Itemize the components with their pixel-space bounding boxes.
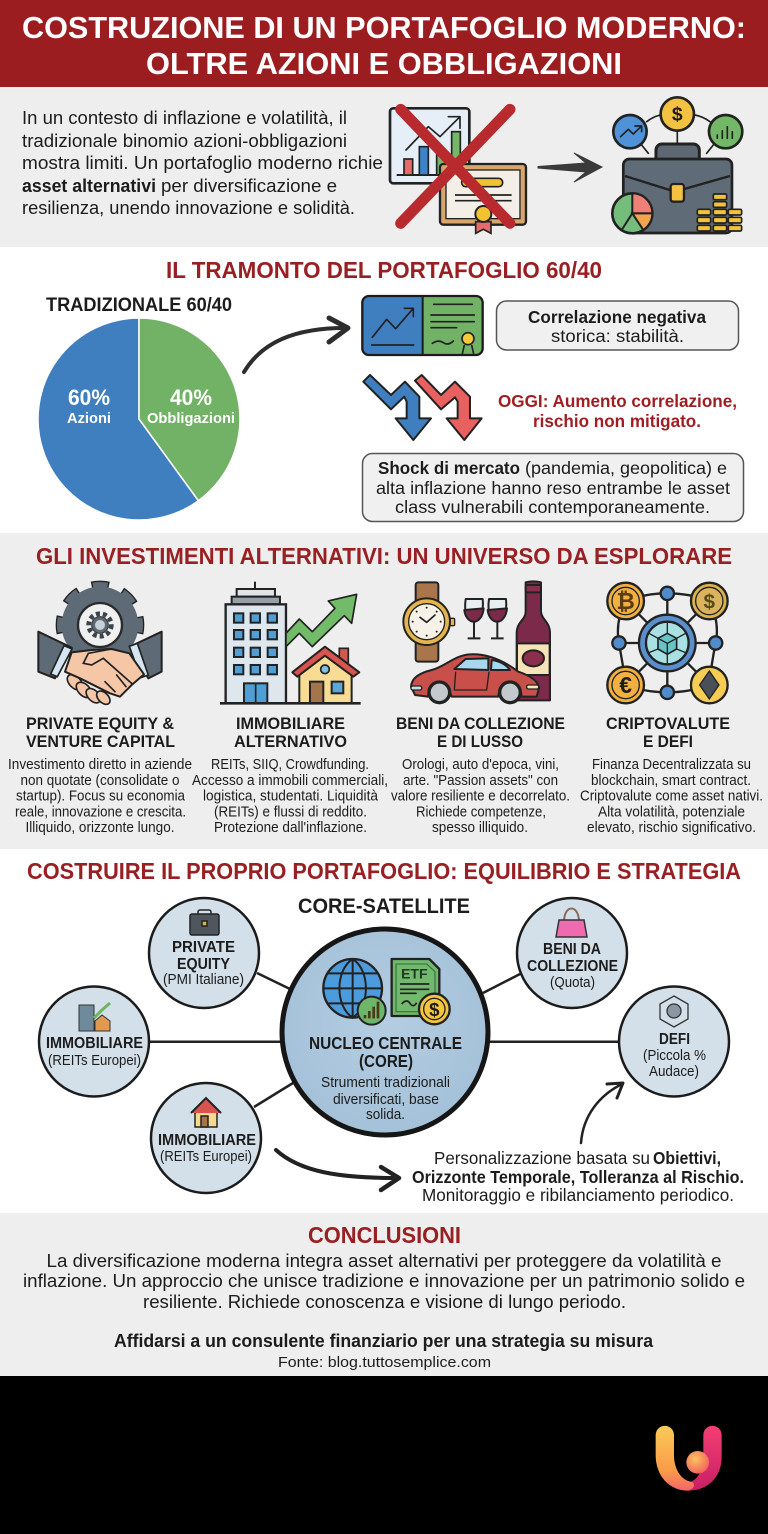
callout: negative correlation: storica: stabilità. [551,326,684,346]
card: private equity: Illiquido, orizzonte lungo. [26,820,174,836]
callout: market shock: class vulnerabili contemporaneamente. [395,497,710,517]
text: personalization: Obiettivi, [653,1148,721,1168]
core circle [282,929,488,1135]
card: crypto and defi: Finanza Decentralizzata su [592,757,751,773]
card: alternative real estate: Accesso a immobili commerciali, [192,773,388,789]
panel: 60/40 portfolio [0,247,768,533]
card: private equity: Investimento diretto in aziende [8,757,192,773]
icon: crypto network [607,583,728,703]
satellite: collectibles: (Quota) [550,975,595,991]
icon: stock and bond card [362,296,483,355]
satellite: defi: (Piccola % [643,1048,706,1064]
card: private equity: PRIVATE EQUITY & [26,714,174,733]
satellite: private equity: PRIVATE [172,939,235,956]
satellite: private equity: (PMI Italiane) [163,972,244,988]
callout: today's correlation [498,391,737,431]
heading: COSTRUIRE IL PROPRIO PORTAFOGLIO: EQUILIBRIO E STRATEGIA [27,858,741,884]
icon: gear and handshake [38,587,162,707]
satellite: defi [619,986,729,1096]
conclusion text: inflazione. Un approccio che unisce tradizione e innovazione per un patrimonio solido e [23,1270,745,1291]
card: collectibles: Orologi, auto d'epoca, vini, [402,757,559,773]
card: collectibles: valore resiliente e decorrelato. [391,788,570,804]
core circle: diversificati, base [333,1092,439,1108]
heading: CONCLUSIONI [308,1222,461,1248]
intro text: In un contesto di inflazione e volatilità, il [22,107,347,128]
pie title: TRADIZIONALE 60/40 [46,295,232,316]
card: private equity: non quotate (consolidate o [20,773,180,789]
arrow: to new portfolio [538,153,602,182]
callout: market shock [362,454,744,522]
intro text: tradizionale binomio azioni-obbligazioni [22,130,347,151]
callout: today's correlation: rischio non mitigato. [533,411,701,431]
card: crypto and defi: Alta volatilità, potenziale [598,804,745,820]
icon: briefcase [190,910,219,935]
title [22,10,746,81]
icon: globe and ETF: $ [429,999,440,1020]
satellite: real estate: (REITs Europei) [48,1053,141,1069]
heading: IL TRAMONTO DEL PORTAFOGLIO 60/40 [166,257,602,283]
panel: header [0,0,768,87]
card: alternative real estate [192,714,388,836]
card: collectibles: Richiede competenze, [416,804,546,820]
panel: conclusions [0,1213,768,1376]
satellite: real estate 2: IMMOBILIARE [158,1132,256,1149]
satellite: collectibles [517,898,627,1008]
card: alternative real estate: (REITs) e flussi di reddito. [214,804,367,820]
satellite: collectibles: BENI DA [543,941,601,958]
call to action: Affidarsi a un consulente finanziario per una strategia su misura [114,1331,654,1351]
icon: defi network [660,996,688,1027]
conclusion text [23,1250,745,1312]
satellite: defi: DEFI [659,1031,690,1048]
icon: crypto network: ₿ [616,588,635,614]
conclusion text: resiliente. Richiede conoscenza e visione di lungo periodo. [143,1291,626,1312]
icon: watch, wine and classic car [403,581,550,703]
card: crypto and defi [580,714,763,836]
icon: house [191,1098,221,1127]
callout: negative correlation: Correlazione negativa [528,307,706,327]
card: collectibles: spesso illiquido. [432,820,528,836]
intro text [22,107,383,218]
callout: market shock: alta inflazione hanno reso entrambe le asset [376,478,730,498]
satellite: real estate 2: (REITs Europei) [160,1149,252,1165]
diagram title: CORE-SATELLITE [298,895,470,918]
callout: today's correlation: OGGI: Aumento correlazione, [498,391,737,411]
panel: introduction [0,87,768,247]
card: crypto and defi: CRIPTOVALUTE [606,714,730,733]
icon: briefcase with diversified assets: $ [672,105,683,126]
title: OLTRE AZIONI E OBBLIGAZIONI [146,46,622,81]
card: private equity: startup). Focus su economia [16,788,186,804]
core circle: NUCLEO CENTRALE [309,1033,462,1053]
arrow: toward defi [581,1083,623,1143]
connectors [149,973,619,1107]
source: Fonte: blog.tuttosemplice.com [278,1355,491,1371]
intro text: resilienza, unendo innovazione e solidità. [22,197,355,218]
card: private equity: VENTURE CAPITAL [26,732,175,751]
panel: black footer [0,1376,768,1534]
card: collectibles: arte. "Passion assets" con [403,773,558,789]
title: COSTRUZIONE DI UN PORTAFOGLIO MODERNO: [22,10,746,45]
pie chart: Azioni [67,410,111,427]
card: collectibles: E DI LUSSO [437,732,523,751]
callout: negative correlation [496,301,738,350]
card: crypto and defi: blockchain, smart contract. [591,773,751,789]
panel: alternative investments [0,533,768,849]
icon: crossed-out stocks and bonds [390,108,526,233]
satellite: real estate: IMMOBILIARE [46,1035,143,1052]
satellite: private equity [149,898,259,1008]
text: personalization [412,1148,744,1205]
pie chart: 40% [170,385,212,410]
intro text: mostra limiti. Un portafoglio moderno richie [22,152,383,173]
panel: core-satellite strategy [0,849,768,1213]
core circle: solida. [366,1107,405,1123]
satellite: real estate 2 [151,1083,261,1193]
card: private equity [8,714,192,836]
satellite: defi: Audace) [649,1064,699,1080]
card: private equity: reale, innovazione e crescita. [15,804,186,820]
card: collectibles: BENI DA COLLEZIONE [396,714,565,733]
icon: building, house and growth arrow [220,582,361,703]
pie chart: Obbligazioni [147,410,235,427]
intro text: per diversificazione e [161,175,337,196]
satellite: real estate [39,986,149,1096]
icon: falling arrows [363,375,482,440]
card: collectibles [391,714,570,836]
icon: building and house [79,1003,110,1031]
text: personalization: Orizzonte Temporale, Tolleranza al Rischio. [412,1167,744,1187]
pie chart [38,318,240,520]
core circle: (CORE) [359,1051,413,1071]
callout: market shock: Shock di mercato [378,458,520,478]
arrow: pie to correlation [244,318,348,372]
icon: crypto network: € [619,672,632,698]
card: alternative real estate: Protezione dall'inflazione. [214,820,367,836]
card: alternative real estate: IMMOBILIARE [236,714,345,733]
callout: market shock: (pandemia, geopolitica) e [525,458,727,478]
card: alternative real estate: REITs, SIIQ, Crowdfunding. [211,757,369,773]
text: personalization: Monitoraggio e ribilanciamento periodico. [422,1185,734,1205]
satellite: private equity: EQUITY [177,956,230,973]
icon: briefcase with diversified assets [612,97,742,233]
icon: globe and ETF: ETF [401,966,428,982]
icon: handbag [556,908,587,937]
card: alternative real estate: ALTERNATIVO [234,732,347,751]
conclusion text: La diversificazione moderna integra asset alternativi per proteggere da volatilità e [46,1250,721,1271]
card: alternative real estate: logistica, studentati. Liquidità [203,788,379,804]
heading: GLI INVESTIMENTI ALTERNATIVI: UN UNIVERSO DA ESPLORARE [36,543,732,569]
satellite: collectibles: COLLEZIONE [527,958,618,975]
intro text: asset alternativi [22,175,156,196]
core circle: Strumenti tradizionali [321,1075,450,1091]
icon: crypto network: $ [704,590,716,613]
pie chart: 60% [68,385,110,410]
icon: globe and ETF [323,959,450,1025]
card: crypto and defi: elevato, rischio significativo. [587,820,756,836]
text: personalization: Personalizzazione basata su [434,1148,650,1168]
arrow: toward personalization [276,1150,399,1190]
card: crypto and defi: E DEFI [643,732,693,751]
icon: logo [656,1426,722,1491]
